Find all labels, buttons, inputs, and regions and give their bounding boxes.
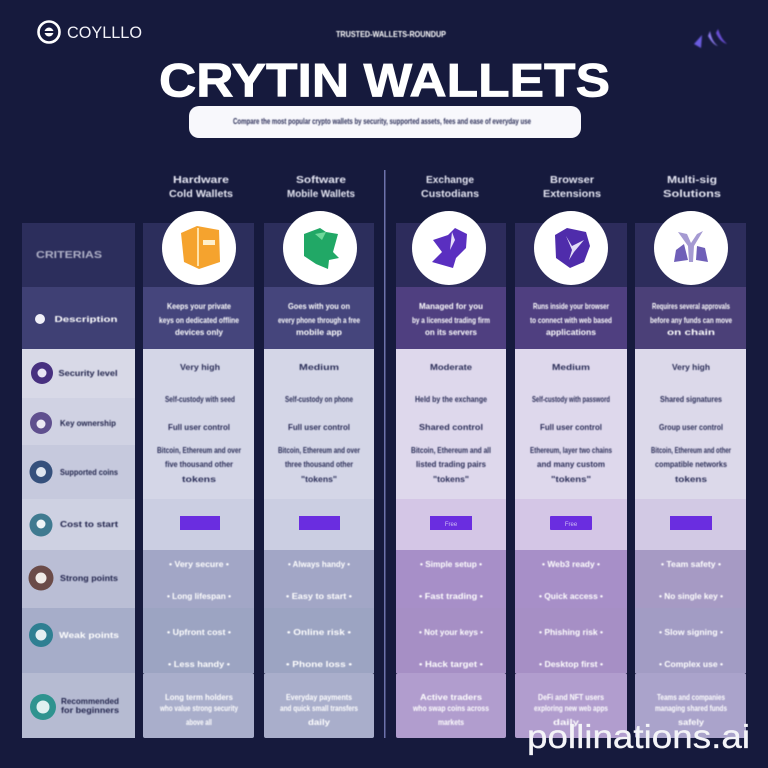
text: details: tokens [182, 474, 216, 484]
column headings: Solutions [663, 189, 722, 200]
button: Free [445, 522, 458, 528]
text: lists: exploring new web apps [534, 703, 608, 713]
text: details: Moderate [430, 362, 472, 372]
text: details: Medium [299, 362, 340, 372]
label: best for [30, 694, 119, 720]
label: assets [30, 412, 116, 434]
vertical divider [384, 170, 386, 738]
text: lists: • Long lifespan • [167, 591, 231, 601]
text: lists: • Hack target • [419, 659, 483, 669]
text: description [412, 301, 490, 337]
label: pros: Strong points [60, 573, 118, 583]
text: lists [655, 559, 727, 727]
text: details: compatible networks [655, 459, 727, 469]
label: cons: Weak points [59, 630, 119, 640]
text: details: Very high [180, 362, 220, 372]
text: details: Full user control [288, 422, 350, 432]
text: details: Self-custody on phone [285, 394, 353, 404]
text: lists: • Desktop first • [539, 659, 603, 669]
text: description: on its servers [425, 327, 477, 337]
text: description: Runs inside your browser [533, 301, 609, 311]
text: details: Bitcoin, Ethereum and over [278, 445, 361, 455]
button [180, 516, 220, 530]
text: details: Bitcoin, Ethereum and over [157, 445, 242, 455]
text: lists: safely [678, 717, 704, 727]
text: lists: managing shared funds [655, 703, 727, 713]
text: lists: • Simple setup • [420, 559, 482, 569]
text: description: by a licensed trading firm [412, 315, 490, 325]
text: details: Full user control [540, 422, 602, 432]
text: description [650, 301, 732, 337]
logo [38, 22, 142, 42]
text: description: Requires several approvals [652, 301, 730, 311]
text: details: Self-custody with seed [165, 394, 235, 404]
label: assets: Key ownership [60, 418, 116, 428]
text: description: on chain [667, 327, 715, 337]
label: cons [29, 623, 119, 647]
text: details: Shared signatures [660, 394, 722, 404]
label: rating [30, 514, 118, 536]
text: details [651, 362, 731, 484]
text: lists: • Phone loss • [286, 659, 352, 669]
icon: top right purple mark [694, 29, 727, 48]
text: details [530, 362, 612, 484]
text: lists: DeFi and NFT users [538, 692, 604, 702]
text: details: Bitcoin, Ethereum and other [651, 445, 731, 455]
text: details: Full user control [168, 422, 230, 432]
text: lists: • Fast trading • [419, 591, 483, 601]
text: lists: • Upfront cost • [167, 627, 231, 637]
text: description: applications [546, 327, 596, 337]
text: lists [280, 559, 358, 727]
text: lists: • Very secure • [169, 559, 229, 569]
text: details: Self-custody with password [532, 394, 610, 404]
panel: column 2 [264, 211, 374, 738]
label: description [35, 314, 118, 324]
text: lists: • No single key • [659, 591, 723, 601]
text: details: Ethereum, layer two chains [530, 445, 612, 455]
text: lists: Active traders [420, 692, 482, 702]
label: platforms: Supported coins [60, 467, 118, 477]
text: details: Bitcoin, Ethereum and all [411, 445, 491, 455]
column headings: Exchange [426, 175, 474, 186]
text: lists: daily [553, 717, 579, 727]
title: CRYTIN WALLETS [159, 54, 610, 106]
text: lists: Everyday payments [286, 692, 352, 702]
panel: column 3 [396, 211, 506, 738]
icon: green wallet [283, 211, 357, 285]
button [670, 516, 712, 530]
icon: orange wallet [162, 211, 236, 285]
text: details [157, 362, 242, 484]
column headings: Browser [550, 175, 594, 186]
panel: column 4 [515, 211, 627, 738]
button [550, 516, 592, 530]
text: lists: and quick small transfers [280, 703, 358, 713]
text: details: Held by the exchange [415, 394, 487, 404]
text: description: Goes with you on [288, 301, 350, 311]
icon: violet wallet [534, 211, 608, 285]
text: details [278, 362, 361, 484]
text: details: and many custom [537, 459, 605, 469]
label: type: Security level [58, 368, 118, 378]
text: details: five thousand other [165, 459, 234, 469]
top tagline: TRUSTED-WALLETS-ROUNDUP [336, 29, 446, 39]
column headings: Cold Wallets [169, 189, 233, 200]
logo: COYLLLO [67, 23, 142, 42]
column headings: Mobile Wallets [287, 189, 355, 200]
label: best for: Recommended [61, 696, 119, 706]
text: description: keys on dedicated offline [159, 315, 239, 325]
column headings [169, 175, 722, 200]
text: lists: who swap coins across [412, 703, 489, 713]
label: platforms [30, 460, 118, 484]
button [430, 516, 472, 530]
text: description: before any funds can move [650, 315, 732, 325]
column headings: Multi-sig [667, 175, 717, 186]
text: lists: Teams and companies [657, 692, 725, 702]
button: Free [565, 522, 578, 528]
text: lists [412, 559, 489, 727]
panel: row labels [22, 223, 135, 738]
text: lists: • Easy to start • [286, 591, 352, 601]
text: lists [159, 559, 238, 727]
text: details: listed trading pairs [416, 459, 486, 469]
label: description: Description [54, 314, 118, 324]
text: details: Very high [672, 362, 710, 372]
text: details: three thousand other [285, 459, 354, 469]
icon: purple wallet [412, 211, 486, 285]
label: pros [28, 566, 118, 590]
text: details: tokens [675, 474, 707, 484]
text: description: mobile app [296, 327, 342, 337]
text: lists: • Always handy • [288, 559, 350, 569]
text: lists: • Web3 ready • [542, 559, 600, 569]
text: lists: who value strong security [159, 703, 238, 713]
button [299, 516, 340, 530]
label: rating: Cost to start [60, 519, 118, 529]
text: lists [534, 559, 608, 727]
text: lists: • Quick access • [539, 591, 603, 601]
subtitle pill [189, 106, 581, 138]
column headings: Software [296, 175, 347, 186]
column headings: Extensions [543, 189, 601, 200]
text: description: Keeps your private [167, 301, 231, 311]
icon: network wallet [654, 211, 728, 285]
label: criteria: CRITERIAS [36, 250, 102, 261]
text: description [159, 301, 239, 337]
text: details: Medium [552, 362, 591, 372]
text: lists: • Complex use • [659, 659, 723, 669]
column headings: Custodians [421, 189, 479, 200]
text: lists: above all [186, 717, 212, 727]
text: details: "tokens" [433, 474, 469, 484]
text: lists: markets [438, 717, 464, 727]
text: lists: • Less handy • [168, 659, 230, 669]
text: description [530, 301, 612, 337]
text: details [411, 362, 491, 484]
column headings: Hardware [173, 175, 230, 186]
panel: column 1 [143, 211, 254, 738]
text: lists: • Not your keys • [419, 627, 483, 637]
text: details: "tokens" [551, 474, 591, 484]
text: lists: • Slow signing • [659, 627, 723, 637]
text: lists: • Online risk • [287, 627, 351, 637]
text: description: Managed for you [419, 301, 483, 311]
text: description: devices only [175, 327, 223, 337]
text: description: every phone through a free [278, 315, 360, 325]
text: lists: daily [308, 717, 330, 727]
text: description [278, 301, 360, 337]
text: details: "tokens" [301, 474, 337, 484]
label: type [31, 362, 118, 384]
text: lists: • Phishing risk • [539, 627, 603, 637]
label: best for: for beginners [61, 705, 119, 715]
text: details: Group user control [659, 422, 723, 432]
text: description: to connect with web based [530, 315, 612, 325]
text: lists: • Team safety • [661, 559, 721, 569]
panel: column 5 [635, 211, 746, 738]
text: details: Shared control [419, 422, 483, 432]
subtitle pill: Compare the most popular crypto wallets by security, supported assets, fees and ease of everyday use [233, 116, 531, 126]
watermark: pollinations.ai [527, 718, 750, 755]
text: lists: Long term holders [165, 692, 233, 702]
